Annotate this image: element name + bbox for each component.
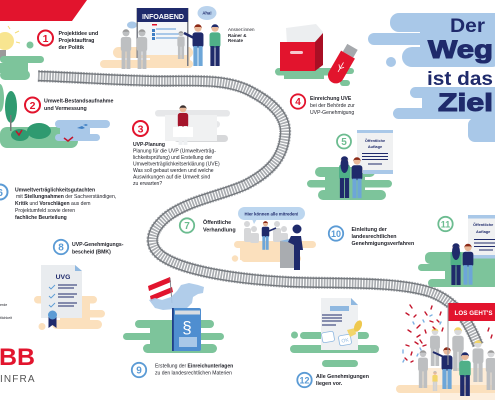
- step 3 text: UVP-Planung: [133, 142, 165, 148]
- presenters label: Ansner:innen: [228, 27, 255, 32]
- step 9 book and map illustration: [123, 277, 224, 353]
- step 3 text: Was soll gebaut werden und welche: [133, 168, 214, 174]
- title: Der: [450, 15, 485, 37]
- step 4 text: bei der Behörde zur: [310, 103, 355, 109]
- step 9 badge: 9: [136, 366, 142, 377]
- step 2 trees and landscape: [0, 84, 110, 148]
- step 4 badge: [291, 94, 305, 109]
- icon: usb stick: [325, 43, 359, 86]
- step 9 badge: [132, 363, 146, 377]
- step 3 text: zu erwarten?: [133, 181, 162, 187]
- step 6 text: und Vorschlägen aus dem: [29, 201, 91, 207]
- step 8 badge: 8: [58, 243, 64, 254]
- step 6 text: Stellungnahmen der Sachverständigen,: [24, 194, 116, 200]
- step 2 text: Umwelt-Bestandsaufnahme: [44, 98, 114, 104]
- step 3 text: Planung für die UVP (Umweltverträg-: [133, 148, 216, 154]
- step 10 text: Einleitung der: [352, 227, 387, 233]
- step 11 notice illustration: Öffentliche: [473, 222, 494, 227]
- step 2 badge: 2: [30, 100, 36, 112]
- title: ist das: [427, 68, 493, 90]
- step 9 text: Einreichunterlagen: [188, 364, 233, 370]
- step 5 badge: [337, 134, 351, 148]
- step 6 text: Umweltverträglichkeitsgutachten: [15, 188, 95, 194]
- step 1 text: Projektidee und: [58, 31, 98, 37]
- step 6 text: fachliche Beurteilung: [15, 215, 67, 221]
- step 6 text: mit: [16, 194, 24, 200]
- step 4 badge: 4: [295, 97, 301, 108]
- step 8 text: bescheid (BMK): [72, 250, 111, 256]
- step 3 text: lichkeitsprüfung) und Erstellung der: [133, 155, 212, 161]
- step 12 approvals illustration: [290, 298, 379, 367]
- step 10 text: Genehmigungsverfahren: [352, 241, 414, 247]
- green clouds behind step 5: [307, 167, 392, 200]
- step 7 text: Verhandlung: [203, 228, 236, 234]
- step 5 badge: 5: [341, 137, 347, 148]
- step 3 planner illustration: [155, 105, 230, 145]
- step 12 text: liegen vor.: [316, 381, 343, 387]
- title: Ziel: [438, 89, 493, 117]
- logo: OBB Infra: [0, 344, 35, 385]
- step 3 badge: [133, 121, 148, 136]
- clipped legend fragments: erde: [0, 303, 7, 307]
- clipped legend fragments: tlichkeit: [0, 316, 12, 320]
- step 2 text: und Vermessung: [44, 106, 87, 112]
- title: [427, 15, 493, 117]
- title cloud: [368, 13, 495, 142]
- step 4 text: Einreichung UVE: [310, 96, 352, 102]
- railway track: [38, 76, 478, 345]
- step 5 notice illustration: Auflage: [368, 144, 383, 149]
- step 7 badge: [180, 218, 194, 233]
- step 4 text: UVP-Genehmigung: [310, 110, 354, 116]
- step 10 badge: [329, 226, 343, 241]
- step 6 text: Projektumfeld sowie deren: [15, 208, 75, 214]
- step 7 badge: 7: [184, 221, 190, 232]
- step 1 text: Projektauftrag: [58, 38, 94, 44]
- step 12 badge: 12: [299, 375, 310, 385]
- step 2 badge: [25, 98, 40, 112]
- step 3 text: Auswirkungen auf die Umwelt sind: [133, 174, 210, 180]
- step 9 text: zu den landesrechtlichen Materien: [155, 370, 232, 376]
- step 12 text: Alle Genehmigungen: [316, 374, 369, 380]
- green cloud step 1: [0, 56, 44, 80]
- logo: OBB Infra: BB: [0, 344, 35, 371]
- step 8 badge: [54, 240, 68, 254]
- public hearing illustration: Hier können alle mitreden!: [245, 211, 299, 216]
- UVG document illustration: UVG: [56, 274, 70, 281]
- presenters label: Rainer &: [228, 33, 247, 38]
- step 12 badge: [297, 373, 312, 387]
- title: Weg: [428, 36, 493, 64]
- presenters label: Renate: [228, 38, 244, 43]
- step 11 notice illustration: [418, 215, 495, 287]
- step 5 notice illustration: [339, 130, 393, 198]
- public hearing illustration: [232, 207, 316, 270]
- step 10 badge: 10: [331, 229, 341, 239]
- step 1 text: der Politik: [58, 45, 84, 51]
- icon: light bulb: [0, 26, 34, 60]
- step 9 text: Erstellung der: [155, 364, 188, 370]
- step 3 badge: 3: [138, 124, 144, 136]
- confetti: [403, 305, 492, 362]
- step 9 book and map illustration: §: [182, 318, 192, 337]
- step 3 text: Umweltverträglichkeitserklärung (UVE): [133, 162, 220, 168]
- logo: OBB Infra: INFRA: [0, 374, 35, 385]
- celebration crowd: LOS GEHT'S: [454, 310, 492, 317]
- step 7 text: Öffentliche: [203, 219, 231, 226]
- red corner banner: [0, 0, 87, 21]
- step 1 badge: 1: [43, 33, 49, 45]
- step 11 notice illustration: Auflage: [476, 229, 491, 234]
- info evening illustration: INFOABEND: [142, 12, 184, 21]
- step 1 badge: [38, 30, 53, 46]
- info evening illustration: [100, 6, 220, 69]
- UVG document illustration: [34, 265, 105, 330]
- step 6 badge: [0, 184, 8, 200]
- step 6 text: Kritik: [15, 201, 28, 207]
- step 11 badge: [438, 217, 453, 231]
- step 12 approvals illustration: OK: [341, 337, 350, 345]
- celebration crowd: [396, 303, 495, 400]
- step 5 notice illustration: Öffentliche: [365, 138, 386, 143]
- step 11 badge: 11: [441, 220, 450, 230]
- step 10 text: landesrechtlichen: [352, 234, 397, 240]
- info evening illustration: Aha!: [202, 10, 212, 16]
- file box illustration: [275, 24, 337, 79]
- step 8 text: UVP-Genehmigungs-: [72, 242, 124, 248]
